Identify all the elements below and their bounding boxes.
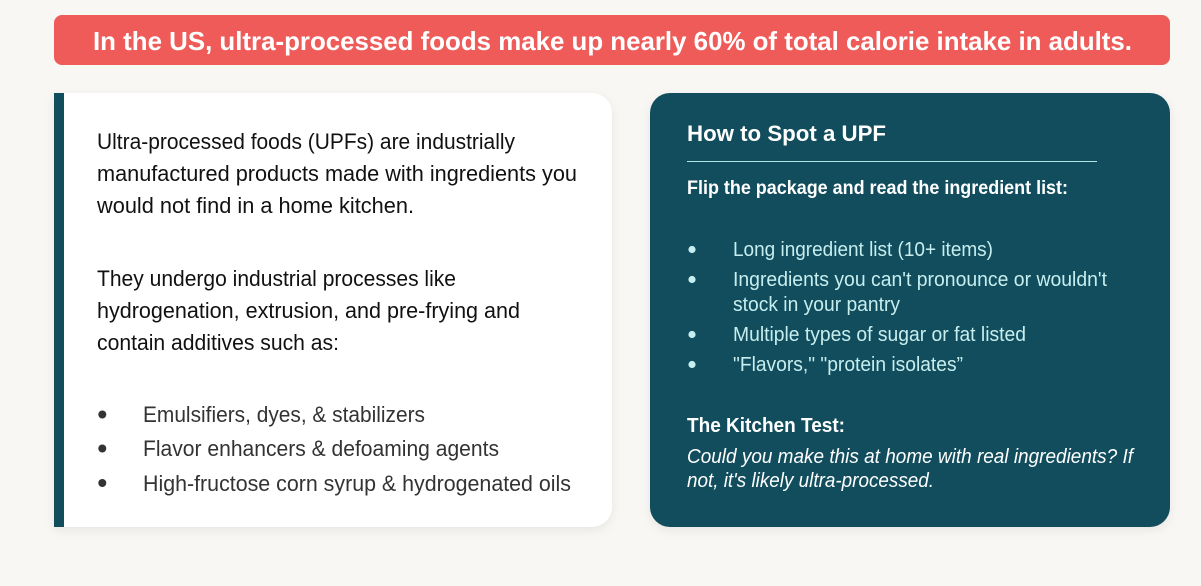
list: additives — [98, 402, 571, 496]
subheading: flip the package: Flip the package and read the ingredient list: — [687, 178, 1068, 199]
text block: kitchen test question: not, it's likely ultra-processed. — [687, 470, 934, 492]
text block: definition: manufactured products made with ingredients you — [97, 161, 577, 186]
banner: US calorie statistic — [54, 15, 1170, 65]
text block: industrial processes — [97, 266, 520, 355]
panel: definition of UPFs — [54, 93, 612, 530]
text block: industrial processes: hydrogenation, extrusion, and pre-frying and — [97, 298, 520, 323]
list: additives: High-fructose corn syrup & hydrogenated oils — [143, 471, 571, 496]
text block: industrial processes: They undergo industrial processes like — [97, 266, 456, 291]
list: label warning signs — [688, 239, 1107, 376]
list: label warning signs: Ingredients you can't pronounce or wouldn't — [733, 269, 1107, 291]
list: label warning signs: Long ingredient list (10+ items) — [733, 239, 993, 261]
text block: kitchen test question: Could you make this at home with real ingredients? If — [687, 446, 1135, 468]
text block: definition: Ultra-processed foods (UPFs) are industrially — [97, 129, 515, 154]
accent bar — [54, 93, 64, 527]
list: label warning signs: stock in your pantry — [733, 294, 900, 316]
text block: definition — [96, 129, 577, 218]
text block: definition: would not find in a home kitchen. — [96, 193, 414, 218]
text block: industrial processes: contain additives such as: — [97, 330, 339, 355]
banner: US calorie statistic: In the US, ultra-processed foods make up nearly 60% of total calorie intake in adults. — [93, 26, 1132, 56]
list: additives: Flavor enhancers & defoaming agents — [143, 436, 499, 461]
list: additives: Emulsifiers, dyes, & stabilizers — [143, 402, 425, 427]
subheading: the kitchen test: The Kitchen Test: — [687, 415, 845, 437]
list: label warning signs: Multiple types of sugar or fat listed — [733, 324, 1026, 346]
heading: How to Spot a UPF — [687, 121, 886, 146]
panel: how to spot a UPF — [650, 93, 1170, 530]
list: label warning signs: "Flavors," "protein isolates” — [733, 354, 963, 376]
text block: kitchen test question — [687, 446, 1135, 492]
